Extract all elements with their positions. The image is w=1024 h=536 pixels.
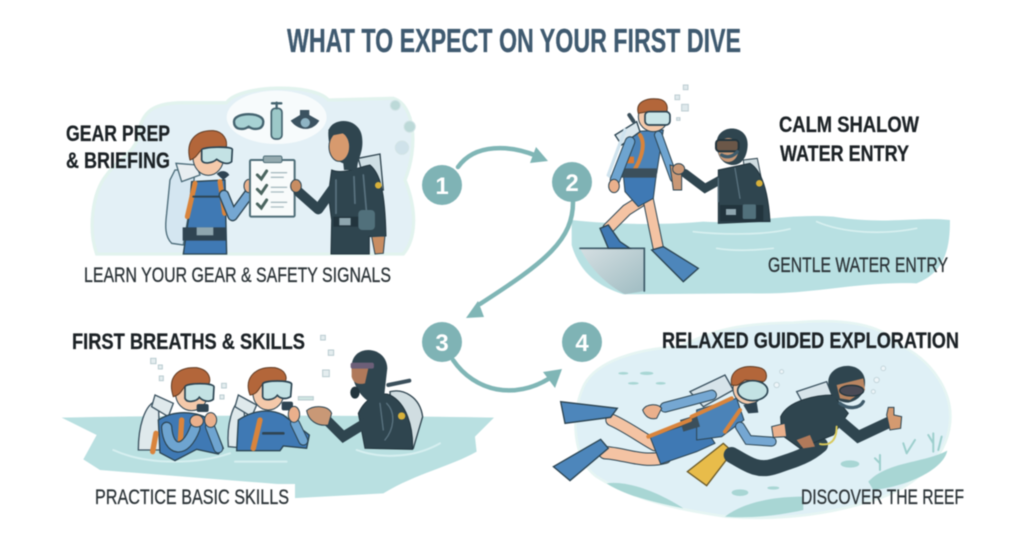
water	[62, 416, 494, 498]
caption: gentle water entry: GENTLE WATER ENTRY	[768, 254, 948, 277]
reef and fish	[607, 372, 947, 517]
panel: relaxed guided exploration	[553, 321, 964, 518]
step number 4	[562, 322, 602, 362]
heading: gear prep and briefing: & BRIEFING	[66, 148, 170, 173]
step number 3: 3	[435, 330, 449, 357]
heading: calm shallow water entry: CALM SHALOW	[779, 112, 919, 137]
pool ledge	[580, 248, 644, 294]
diver instructor	[291, 121, 386, 254]
diver student two	[228, 367, 309, 451]
diver instructor swimming	[687, 366, 902, 486]
diver student one	[138, 368, 223, 461]
heading: calm shallow water entry	[779, 112, 919, 166]
instructor in water	[307, 350, 423, 449]
heading: relaxed guided exploration: RELAXED GUIDED EXPLORATION	[662, 328, 959, 353]
instructor in water	[673, 129, 770, 223]
icon: gear thought bubble	[227, 91, 327, 144]
title: WHAT TO EXPECT ON YOUR FIRST DIVE	[287, 22, 741, 59]
icon: bubbles	[675, 85, 688, 120]
underwater background	[576, 321, 950, 518]
step number 1: 1	[435, 173, 449, 200]
heading: gear prep and briefing: GEAR PREP	[66, 121, 170, 146]
panel: gear prep and briefing	[66, 88, 415, 287]
water	[572, 216, 950, 294]
diver stepping in	[600, 99, 698, 282]
arrow: step 2 to step 3	[466, 200, 573, 318]
icon: bubbles	[151, 335, 334, 400]
panel: first breaths and skills	[62, 329, 494, 509]
heading: gear prep and briefing	[66, 121, 170, 173]
icon: bubbles	[774, 366, 886, 394]
step number 4: 4	[575, 330, 589, 357]
arrow: step 3 to step 4	[453, 360, 562, 390]
caption: discover the reef: DISCOVER THE REEF	[801, 486, 964, 509]
step number 2: 2	[565, 170, 579, 197]
icon: bubbles	[390, 100, 415, 154]
clipboard checklist	[250, 156, 295, 217]
step number 2	[552, 162, 592, 202]
heading: calm shallow water entry: WATER ENTRY	[780, 141, 909, 166]
arrow: step 1 to step 2	[458, 147, 548, 167]
diver student swimming	[553, 366, 772, 481]
caption: learn your gear: LEARN YOUR GEAR & SAFETY SIGNALS	[84, 264, 391, 287]
diver student	[166, 131, 254, 254]
panel background cloud	[92, 88, 414, 254]
step number 1	[422, 165, 462, 205]
step number 3	[422, 322, 462, 362]
caption: practice basic skills: PRACTICE BASIC SKILLS	[95, 486, 289, 509]
heading: first breaths and skills: FIRST BREATHS & SKILLS	[72, 329, 305, 354]
panel: calm shallow water entry	[572, 85, 950, 294]
